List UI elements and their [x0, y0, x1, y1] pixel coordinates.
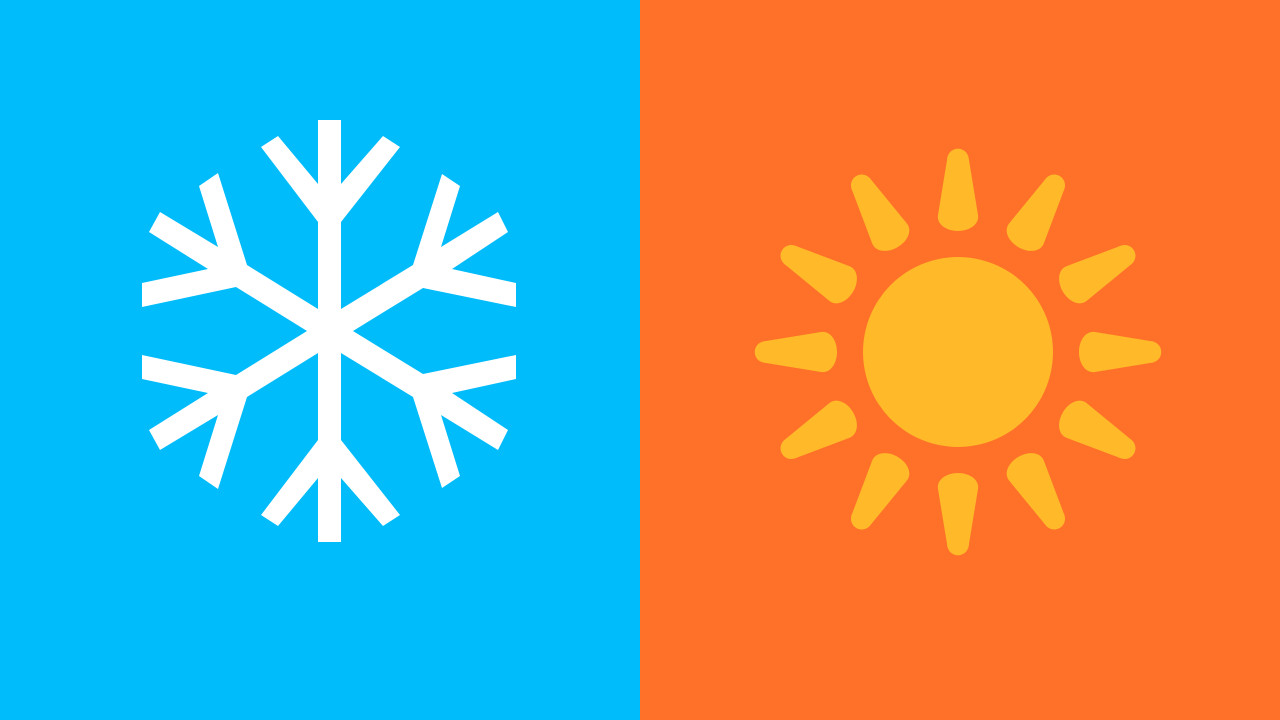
icon: sun: [755, 149, 1161, 555]
panel: cold background: [0, 0, 640, 720]
icon: snowflake: [142, 120, 516, 542]
panel: hot background: [640, 0, 1280, 720]
sun disc: [863, 257, 1053, 447]
sun rays: [755, 149, 1161, 555]
